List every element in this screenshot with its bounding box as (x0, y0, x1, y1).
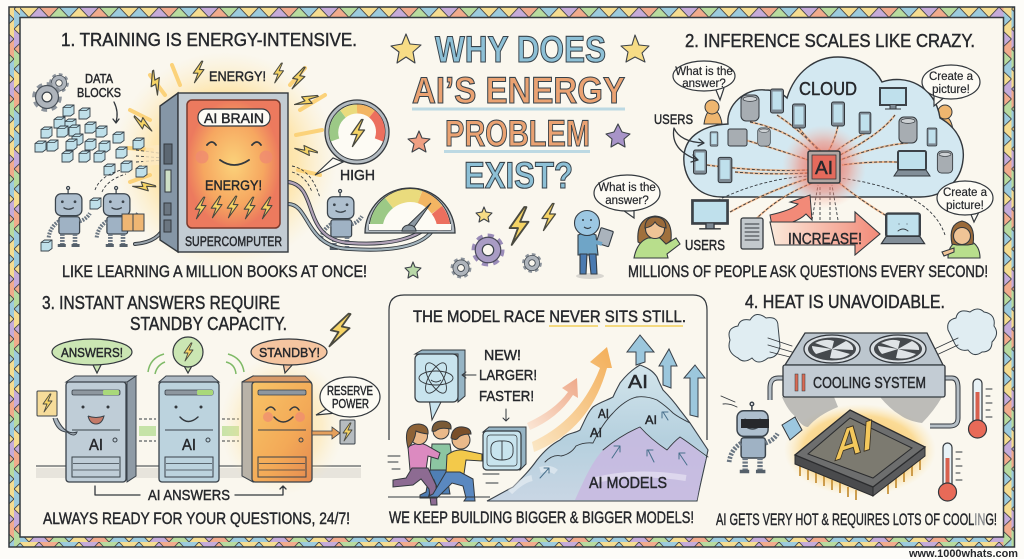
AI labels on mountain (590, 372, 657, 440)
label: users lower: USERS (685, 238, 725, 254)
speech bubble: what is the answer, lower: answer? (605, 195, 649, 207)
heading 3: 3. INSTANT ANSWERS REQUIRE (42, 292, 280, 313)
cloud devices (694, 88, 953, 183)
speech bubble: reserve power: RESERVE (327, 384, 373, 398)
heat glow (784, 404, 936, 496)
atom icon bubble (415, 350, 465, 420)
increase arrow (770, 212, 880, 255)
speech bubble: what is the answer, top: answer? (682, 78, 726, 90)
middle man (420, 421, 454, 498)
wifi arcs (148, 354, 244, 374)
mountain of AI models (487, 365, 708, 501)
speech bubble: answers: ANSWERS! (61, 345, 123, 360)
speech bubble: create a picture, lower: Create a (943, 187, 988, 199)
woman left (634, 216, 680, 258)
label: cooling system: COOLING SYSTEM (813, 375, 926, 392)
small orange user right (935, 105, 953, 130)
speech bubble: create a picture, top: picture! (932, 84, 970, 96)
AI answers bracket (95, 486, 286, 504)
heading 1: 1. TRAINING IS ENERGY-INTENSIVE. (61, 29, 357, 50)
caption model race: WE KEEP BUILDING BIGGER & BIGGER MODELS! (389, 508, 694, 527)
AI labels on mountain: AI (628, 372, 648, 392)
speech bubble: what is the answer, lower (594, 175, 660, 218)
speech bubble: what is the answer, top (673, 61, 735, 100)
green links between servers (139, 419, 239, 441)
panel: 4 heat (716, 291, 997, 529)
small orange user left (704, 100, 722, 124)
robot with cloth (721, 396, 802, 472)
blue up arrows (627, 335, 705, 417)
thermometer 1 (968, 379, 992, 438)
data blocks label: BLOCKS (77, 85, 121, 100)
speech bubble: create a picture, lower: picture! (946, 200, 984, 212)
fans (804, 335, 926, 363)
AI labels on mountain: AI (645, 413, 657, 427)
screen bolts (195, 196, 272, 219)
energy glow (113, 52, 337, 268)
server 2 (159, 376, 219, 482)
icon: gears (36, 75, 67, 108)
main title: WHY DOES (435, 29, 606, 70)
speech bubble: standby: STANDBY! (259, 345, 320, 360)
robot 2 (97, 187, 138, 246)
curved red arrow (770, 195, 812, 226)
panel: 2 inference (594, 30, 993, 281)
speech bubble: what is the answer, lower: What is the (598, 182, 656, 194)
heading 4: 4. HEAT IS UNAVOIDABLE. (745, 291, 945, 312)
pipes (770, 378, 958, 426)
AI answers bracket: AI ANSWERS (148, 487, 230, 504)
AI labels on mountain: AI (590, 425, 602, 440)
panel: model race (388, 295, 708, 527)
panel outline (389, 295, 707, 440)
AI labels on mountain: AI (598, 406, 609, 421)
cooling system (783, 333, 945, 397)
reserve output arrow and battery (312, 420, 355, 444)
dial gauge with speech tail (315, 100, 389, 175)
box held by robot (122, 214, 144, 231)
three people pushing (393, 421, 482, 505)
cables (135, 182, 436, 250)
decorative bolts and gears (453, 204, 556, 276)
semicircular gauge (365, 188, 455, 233)
speech bubble: what is the answer, top: What is the (675, 66, 733, 78)
new larger faster labels: LARGER! (479, 367, 537, 384)
caption 1: LIKE LEARNING A MILLION BOOKS AT ONCE! (62, 262, 367, 281)
underlines (549, 325, 683, 327)
request lines to AI chip (700, 115, 945, 235)
robot 3 (321, 190, 362, 248)
label: high: HIGH (340, 167, 375, 184)
new larger faster labels: NEW! (484, 347, 521, 364)
label: users upper: USERS (654, 111, 693, 127)
main title: PROBLEM (445, 113, 590, 154)
new larger faster labels (462, 347, 537, 421)
label: AI brain: AI BRAIN (204, 110, 264, 126)
speech bubble: create a picture, top (922, 65, 980, 106)
main title: EXIST? (464, 155, 573, 196)
energy bolts (131, 61, 319, 195)
speech bubble: standby (251, 339, 327, 373)
heading: THE MODEL RACE NEVER SITS STILL. (413, 307, 686, 326)
label: supercomputer: SUPERCOMPUTER (185, 234, 282, 249)
main title: AI’S ENERGY (412, 70, 625, 111)
battery left (37, 391, 77, 435)
panel: 1 training (35, 29, 455, 281)
speech bubble: create a picture, top: Create a (929, 71, 974, 83)
server 1: AI (89, 437, 103, 454)
label: increase: INCREASE! (788, 231, 862, 248)
AI chip: AI (815, 158, 833, 178)
woman right (942, 221, 980, 258)
panel: 3 standby (36, 292, 380, 528)
main title (412, 29, 625, 196)
server 3 standby (220, 355, 344, 495)
speech bubble: bolt (173, 337, 203, 373)
bottom devices (692, 200, 925, 249)
new larger faster labels: FASTER! (479, 388, 534, 405)
thermometer 2 (938, 443, 962, 501)
smoke (782, 397, 942, 427)
cloud (684, 57, 963, 197)
supercomputer (160, 93, 288, 252)
speech bubble: reserve power: POWER (332, 397, 369, 411)
speech bubble: reserve power (316, 377, 380, 417)
AI chip hot (795, 409, 925, 500)
decorative stars (391, 34, 649, 278)
brain cube (483, 427, 526, 470)
robot 1 (49, 187, 90, 246)
label: AI models: AI MODELS (589, 475, 667, 492)
label: energy on screen: ENERGY! (205, 177, 262, 193)
person with tablet (574, 210, 613, 279)
server 2: AI (182, 437, 196, 454)
data block cubes (35, 105, 147, 251)
floor line (36, 466, 361, 478)
server 1 (66, 376, 136, 482)
speech bubble: answers (52, 339, 132, 373)
label: cloud: CLOUD (799, 79, 857, 99)
AI chip (782, 125, 866, 209)
speech bubble: create a picture, lower (937, 181, 993, 222)
icon: big bolt (327, 311, 353, 350)
heading 2: 2. INFERENCE SCALES LIKE CRAZY. (685, 30, 975, 51)
woman pushing (393, 424, 440, 505)
caption 3: ALWAYS READY FOR YOUR QUESTIONS, 24/7! (43, 509, 350, 528)
label: AI on chip: AI (833, 409, 875, 470)
label: energy: ENERGY! (209, 68, 266, 84)
heading 3 (42, 292, 287, 334)
smiling face (196, 142, 272, 165)
man in yellow (429, 427, 482, 501)
heading 3: STANDBY CAPACITY. (130, 313, 287, 334)
data blocks label: DATA (85, 71, 113, 86)
growth arrows (527, 347, 612, 452)
steam clouds (729, 309, 997, 362)
